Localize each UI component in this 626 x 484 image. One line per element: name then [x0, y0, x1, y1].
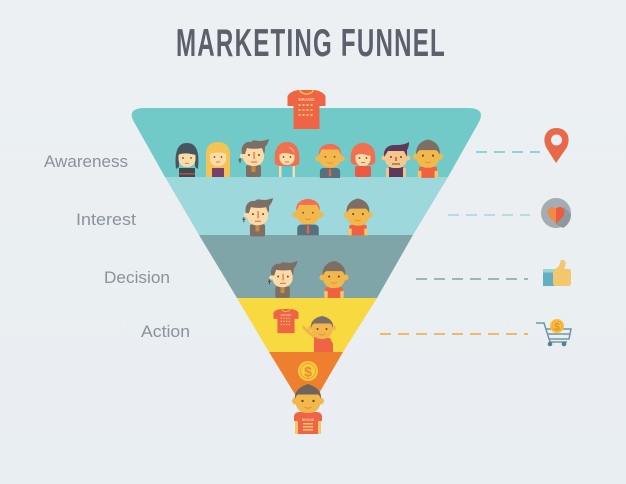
icon: dollar coin: $: [304, 364, 312, 380]
person: customer at bottom of funnel: BRAND: [302, 418, 315, 422]
person: man in decision band: [268, 261, 298, 298]
funnel band: purchase: [269, 352, 343, 414]
person: red hair woman with apron: [275, 142, 299, 177]
icon: dollar coin: [298, 361, 318, 381]
person: blonde woman: [206, 142, 230, 177]
funnel: [132, 108, 481, 414]
funnel band: interest: [165, 177, 448, 235]
icon: t-shirt in action band: [273, 309, 299, 333]
person: boy pointing at shirt: [302, 316, 336, 352]
funnel band: action: [237, 298, 377, 352]
connector: interest: [448, 214, 530, 216]
icon: t-shirt top: [288, 90, 326, 129]
icon: shopping cart with coin: $: [554, 322, 560, 333]
title: MARKETING FUNNEL: [176, 22, 446, 65]
label: Decision: Decision: [104, 268, 170, 287]
icon: thumbs up: [543, 260, 571, 286]
icon: heart in circle: [541, 198, 571, 228]
person: boy in interest band: [343, 198, 373, 235]
connector: awareness: [476, 151, 540, 153]
connector: decision: [416, 278, 528, 280]
icon: shopping cart with coin: [536, 319, 571, 346]
person: man in interest band: [242, 198, 273, 236]
connector: action: [380, 333, 528, 335]
label: Action: Action: [141, 322, 190, 341]
person: dark hair woman: [176, 143, 198, 177]
icon: location pin: [544, 128, 569, 163]
funnel band: decision: [199, 235, 413, 298]
person: man in suit: [315, 144, 345, 178]
person: red hair woman in red: [351, 143, 375, 177]
person: purple hair man: [382, 142, 410, 177]
person: boy in orange tee: [413, 140, 443, 178]
label: Interest: Interest: [76, 210, 136, 229]
person: suit man in interest band: [292, 199, 324, 235]
person: customer at bottom of funnel: [292, 384, 324, 434]
person: brown hair man: [238, 139, 269, 177]
label: Awareness: Awareness: [44, 152, 128, 171]
person: boy in decision band: [319, 261, 349, 298]
funnel band: awareness: [132, 108, 481, 177]
